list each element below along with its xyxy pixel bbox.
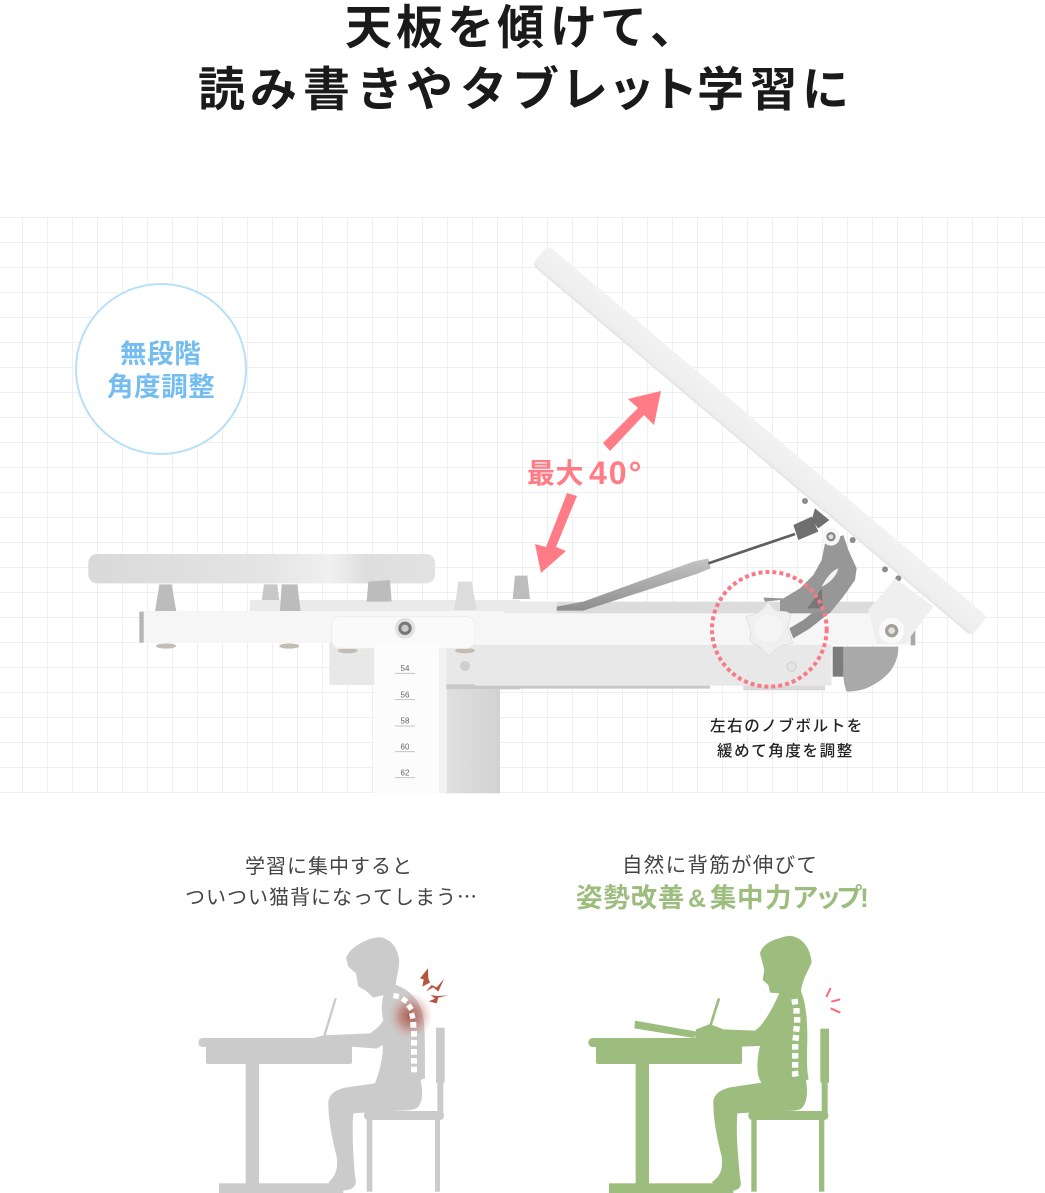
shadow below lower rail bbox=[447, 684, 710, 689]
spine bbox=[791, 999, 800, 1077]
badge: stepless angle adjustment: 無段階 bbox=[120, 339, 201, 369]
text: improved posture: & bbox=[688, 885, 706, 913]
label: maximum 40 degrees: 40° bbox=[589, 455, 643, 491]
front curve of bracket bbox=[789, 611, 832, 638]
clamp plate bbox=[332, 617, 475, 648]
caption: knob bolt note: 左右のノブボルトを bbox=[710, 716, 864, 735]
chair bbox=[364, 1028, 445, 1192]
height scale numbers: 60 bbox=[401, 742, 410, 751]
clamp bolt bbox=[395, 618, 415, 639]
slouching figure bbox=[313, 937, 425, 1191]
lower bracket bbox=[329, 643, 520, 685]
peg bbox=[513, 576, 530, 599]
height scale numbers: 58 bbox=[401, 717, 410, 726]
stylus bbox=[324, 998, 336, 1036]
strut head bbox=[793, 508, 829, 540]
underside strip bbox=[743, 685, 825, 690]
height scale numbers: 54 bbox=[401, 664, 410, 673]
arrow: downward bbox=[535, 493, 577, 573]
support pegs bbox=[155, 580, 477, 612]
arrow: upward bbox=[603, 391, 661, 451]
badge: stepless angle adjustment: 角度調整 bbox=[107, 372, 215, 402]
height scale numbers bbox=[401, 664, 410, 778]
panel: desk photo on grid background bbox=[0, 217, 1045, 793]
spine bbox=[393, 993, 417, 1072]
upright figure bbox=[695, 936, 812, 1191]
desk: tilted top mechanism back layer bbox=[503, 534, 877, 614]
badge: stepless angle adjustment bbox=[76, 284, 246, 454]
text: improved posture: 自然に背筋が伸びて bbox=[622, 854, 818, 877]
desk: adjustment bracket and knob bbox=[447, 498, 933, 692]
text: improved posture: 集中力アップ! bbox=[710, 883, 869, 913]
pain marks bbox=[420, 968, 448, 1003]
label: maximum 40 degrees: 最大 bbox=[527, 458, 584, 489]
board bolts bbox=[802, 498, 901, 581]
caption: knob bolt note: 緩めて角度を調整 bbox=[717, 742, 854, 760]
illustration: upright child at tilted desk bbox=[588, 936, 840, 1193]
illustration: slouching child at desk bbox=[198, 937, 448, 1193]
desk bbox=[588, 1021, 743, 1193]
rear plate bbox=[250, 600, 520, 612]
rear rail bbox=[503, 602, 557, 614]
text: slouching posture: 学習に集中すると bbox=[245, 855, 413, 878]
desk: flat left section bbox=[88, 554, 520, 793]
back pain glow bbox=[387, 992, 433, 1040]
underside bolts bbox=[156, 643, 299, 649]
front rail bbox=[475, 613, 915, 645]
rear column bbox=[447, 689, 500, 793]
small rivet bbox=[787, 662, 796, 671]
height scale numbers: 56 bbox=[401, 691, 410, 700]
title: 天板を傾けて、 bbox=[345, 1, 697, 54]
rear peg bbox=[262, 584, 279, 601]
lower rail bbox=[475, 645, 832, 686]
highlight marks bbox=[826, 988, 840, 1013]
grey bottom cap bbox=[843, 647, 898, 692]
text: slouching posture: ついつい猫背になってしまう… bbox=[185, 881, 478, 910]
rear part of curved bracket bbox=[763, 535, 857, 615]
height scale column bbox=[374, 643, 439, 793]
text: slouching posture bbox=[185, 855, 478, 910]
hinge plate bbox=[868, 578, 933, 644]
caption: knob bolt note bbox=[710, 716, 864, 760]
height scale numbers: 62 bbox=[401, 769, 410, 778]
title: 読み書きやタブレット学習に bbox=[198, 63, 849, 116]
gas spring bbox=[557, 534, 795, 611]
dotted highlight ring bbox=[712, 572, 827, 687]
hinge bolt bbox=[879, 618, 904, 643]
pivot bolt bbox=[822, 528, 840, 546]
title bbox=[198, 1, 849, 116]
text: improved posture bbox=[576, 854, 869, 913]
desk bbox=[198, 1038, 353, 1193]
tilted tabletop bbox=[532, 245, 988, 636]
front rail bbox=[140, 611, 520, 643]
label: maximum 40 degrees bbox=[527, 455, 643, 491]
stylus bbox=[711, 998, 719, 1025]
chair bbox=[748, 1029, 829, 1192]
star knob bbox=[746, 602, 793, 656]
text: improved posture: 姿勢改善 bbox=[576, 883, 685, 913]
flat tabletop bbox=[88, 554, 435, 583]
